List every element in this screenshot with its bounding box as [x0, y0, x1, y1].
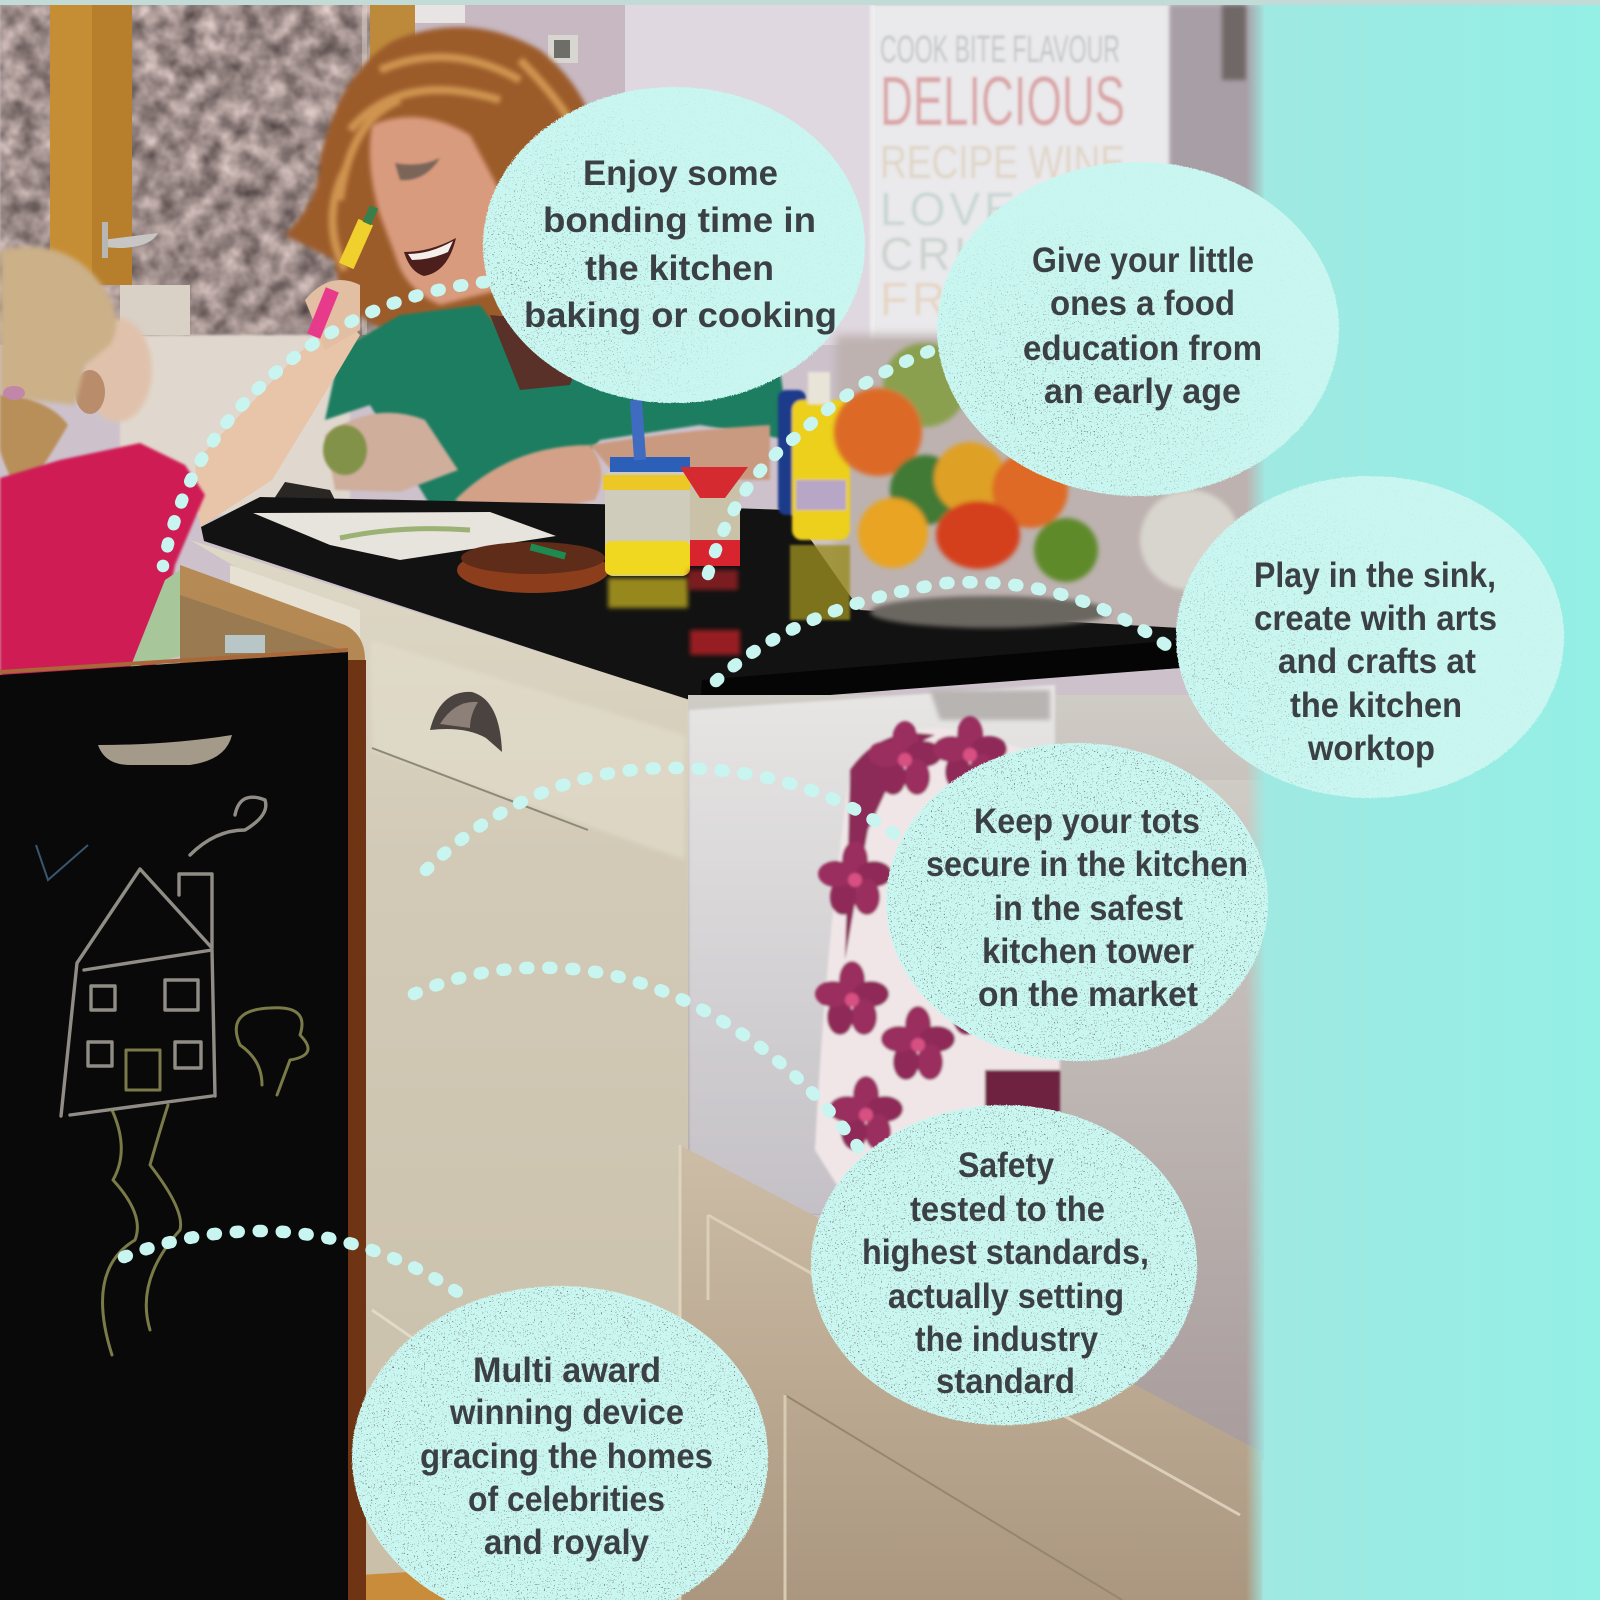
bubble text: secure: secure in the kitchen [926, 845, 1248, 884]
wall poster: COOK BITE FLAVOUR [880, 29, 1120, 71]
bubble text: secure [926, 802, 1248, 1014]
dotted connector: food education [708, 349, 935, 574]
cream cabinet [190, 540, 690, 1600]
bubble: food education [937, 162, 1339, 496]
green top [325, 305, 790, 505]
bubble text: sink and crafts: Play in the sink, [1254, 556, 1496, 595]
bubble text: food education [1023, 241, 1262, 411]
chair / sill [120, 335, 350, 515]
kitchen photo background [0, 0, 1280, 1600]
paint pots [603, 400, 748, 655]
girl [0, 205, 378, 680]
bubble text: sink and crafts: and crafts at [1278, 642, 1476, 681]
ponytail [0, 395, 68, 497]
floor [360, 1570, 470, 1600]
bubble text: secure: kitchen tower [982, 932, 1194, 971]
drawer handle [430, 692, 502, 752]
bubble text: food education: education from [1023, 329, 1262, 368]
dotted connector: award [124, 1231, 465, 1297]
bubble text: bonding: Enjoy some [583, 154, 778, 193]
paint bottles [778, 372, 850, 620]
bubble: secure [886, 743, 1268, 1061]
dish [457, 542, 609, 593]
bubble text: secure: in the safest [994, 889, 1183, 928]
woman's arm and hands [590, 425, 770, 480]
learning tower with chalkboard [0, 565, 366, 1600]
tea towel [815, 716, 1060, 1190]
bubble text: safety: Safety [958, 1146, 1054, 1185]
bubble text: safety: actually setting [888, 1277, 1124, 1316]
bubble text: award: of celebrities [468, 1480, 665, 1519]
shelf backdrop behind fruit [835, 335, 1265, 645]
bubble text: secure: on the market [978, 975, 1198, 1014]
hair [285, 27, 600, 335]
dotted connector: secure [426, 768, 900, 870]
bubble text: safety [862, 1146, 1149, 1401]
cheek and ear [84, 318, 152, 422]
wall poster: LOVE IT [880, 183, 1084, 235]
bubble text: bonding [524, 154, 837, 335]
silver handle [98, 735, 232, 765]
bubble: bonding [483, 87, 865, 403]
fridge side [1170, 5, 1265, 515]
bubble text: award [420, 1351, 713, 1562]
bubble text: safety: standard [936, 1362, 1075, 1401]
wall poster: RECIPE WINE [880, 136, 1125, 188]
window and garden view [0, 0, 420, 345]
bubble text: sink and crafts [1254, 556, 1497, 768]
belfast sink and tea towel [688, 685, 1270, 1460]
bubble text: bonding: the kitchen [585, 249, 774, 288]
bubble: safety [811, 1105, 1197, 1425]
woman [270, 27, 790, 521]
wall [415, 5, 625, 345]
bubble text: safety: tested to the [910, 1190, 1105, 1229]
worktop with paper and paints [201, 343, 1240, 705]
wall poster: DELICIOUS [880, 62, 1125, 140]
bubble text: bonding: baking or cooking [524, 296, 837, 335]
face [370, 117, 510, 305]
magenta top [0, 443, 205, 680]
bubble text: sink and crafts: create with arts [1254, 599, 1497, 638]
bubble text: sink and crafts: the kitchen [1290, 686, 1462, 725]
bubble text: safety: highest standards, [862, 1233, 1149, 1272]
lower cabinet [680, 1145, 1262, 1600]
bubble: award [352, 1286, 768, 1600]
bubble text: award: Multi award [473, 1351, 661, 1390]
chalkboard panel [0, 652, 348, 1600]
fruit bowl [834, 343, 1240, 628]
dotted connector: safety [414, 968, 860, 1150]
wall poster: FRESH [880, 273, 1056, 325]
chalk house drawing [36, 797, 308, 1355]
bubble text: food education: Give your little [1032, 241, 1254, 280]
bubble text: secure: Keep your tots [974, 802, 1200, 841]
bubble text: award: winning device [449, 1393, 684, 1432]
teal side panel [1246, 0, 1600, 1600]
dotted connector: worktop [716, 582, 1170, 681]
bubble text: sink and crafts: worktop [1307, 729, 1435, 768]
black worktop [201, 497, 1180, 704]
bubble text: award: and royaly [484, 1523, 649, 1562]
arm [195, 320, 360, 527]
bubble text: food education: an early age [1044, 372, 1241, 411]
top strip [0, 0, 1600, 5]
bubble text: award: gracing the homes [420, 1437, 713, 1476]
wall poster: CRUNCH [880, 228, 1103, 280]
blonde hair [0, 247, 116, 405]
dotted connector: bonding [163, 282, 485, 566]
tower side wood [180, 565, 365, 1600]
bubble text: bonding: bonding time in [543, 201, 816, 240]
paper [253, 512, 556, 560]
wall poster [870, 5, 1170, 340]
bubble text: food education: ones a food [1050, 284, 1235, 323]
hand and pens [305, 205, 378, 350]
bubble: sink and crafts [1176, 476, 1564, 798]
bubble text: safety: the industry [915, 1320, 1098, 1359]
green pen [520, 507, 610, 521]
